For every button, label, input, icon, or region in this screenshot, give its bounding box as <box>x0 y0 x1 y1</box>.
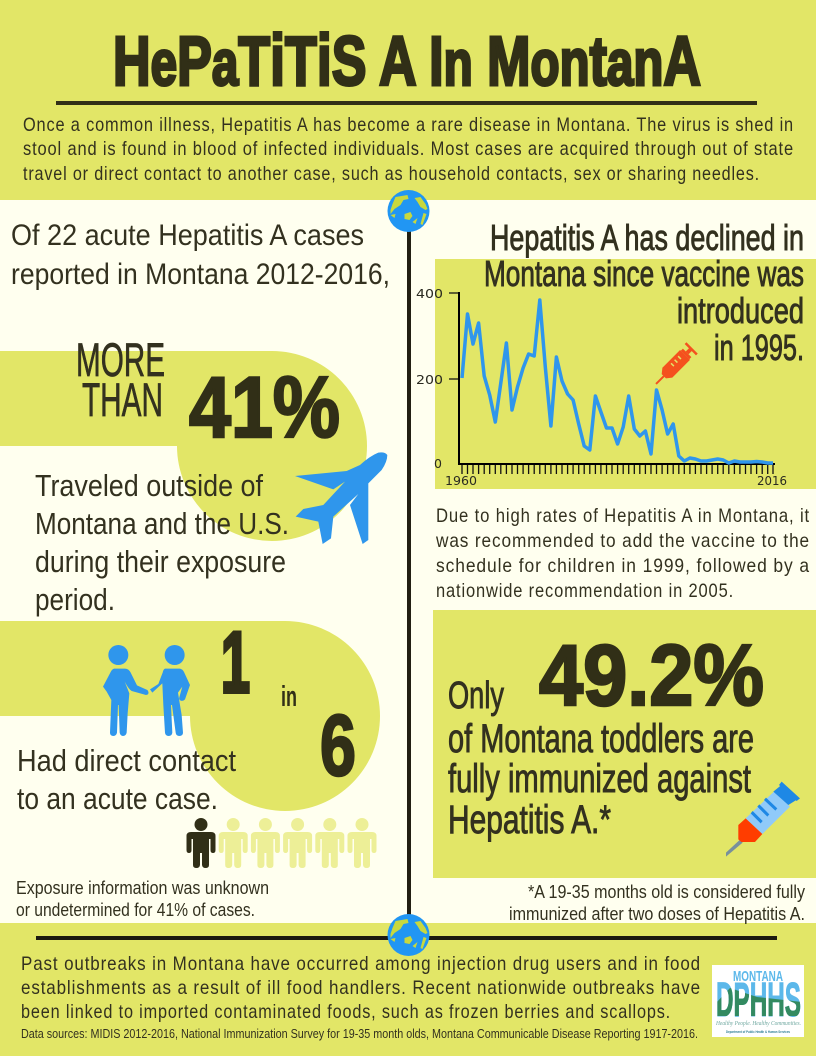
travel text: period. <box>35 582 115 617</box>
logo: Montana DPHHS: MONTANA <box>733 968 783 985</box>
travel text: during their exposure <box>35 544 286 579</box>
data sources: Data sources: MIDIS 2012-2016, National Immunization Survey for 19-35 month olds, Montana Communicable Disease Reporting 1917-2016. <box>21 1026 698 1041</box>
icon: two people shaking hands <box>103 645 190 736</box>
panel: header <box>0 0 816 200</box>
vaccine recommendation text <box>435 505 810 602</box>
stat: 49.2%: 49.2% <box>539 628 764 724</box>
chart heading <box>484 217 804 368</box>
exposure note: Exposure information was unknown <box>16 878 269 898</box>
logo: Montana DPHHS <box>712 965 804 1037</box>
line chart: cases 1960-2016: 2016 <box>757 473 787 488</box>
icon: airplane <box>295 452 387 544</box>
panel: footer <box>0 923 816 1056</box>
title rule <box>56 101 757 105</box>
title: HePaTiTiS A In MontanA <box>113 21 701 101</box>
more than label: MORE <box>76 333 165 386</box>
icon row: 1 of 6 people <box>186 818 376 868</box>
intro paragraph <box>23 114 794 185</box>
icon: bottom globe <box>388 914 430 956</box>
more than label <box>76 333 165 426</box>
logo: Montana DPHHS: Department of Public Health & Human Services <box>726 1030 790 1034</box>
line chart: cases 1960-2016: 1960 <box>445 473 477 488</box>
only label: Only <box>448 675 504 717</box>
stat: 6: 6 <box>320 698 356 794</box>
lead text: 22 cases: Of 22 acute Hepatitis A cases <box>11 219 364 252</box>
panel: chart background <box>435 259 816 489</box>
outbreaks paragraph: Past outbreaks in Montana have occurred among injection drug users and in food <box>21 953 701 975</box>
stat: in: in <box>281 681 297 713</box>
icon: top globe <box>388 190 430 232</box>
outbreaks paragraph: been linked to imported contaminated foods, such as frozen berries and scallops. <box>21 1001 671 1023</box>
panel: left band 1 in 6 <box>0 621 380 811</box>
toddlers text <box>448 717 754 842</box>
exposure note <box>16 878 269 920</box>
lead text: 22 cases: reported in Montana 2012-2016, <box>11 258 390 291</box>
outbreaks paragraph <box>21 953 701 1023</box>
toddlers text: Hepatitis A.* <box>448 798 611 842</box>
direct contact text: to an acute case. <box>17 781 218 816</box>
footer rule <box>36 936 777 940</box>
line chart: cases 1960-2016 <box>416 286 787 488</box>
footnote <box>509 882 805 924</box>
more than label: THAN <box>82 373 163 426</box>
lead text: 22 cases <box>11 219 390 291</box>
panel: toddlers immunization <box>433 610 816 878</box>
travel text <box>35 468 289 617</box>
vaccine recommendation text: nationwide recommendation in 2005. <box>436 580 734 602</box>
line chart: cases 1960-2016: 200 <box>416 372 443 387</box>
outbreaks paragraph: establishments as a result of ill food handlers. Recent nationwide outbreaks have <box>21 977 701 999</box>
exposure note: or undetermined for 41% of cases. <box>16 900 255 920</box>
direct contact text: Had direct contact <box>17 743 236 778</box>
panel: left band 41% <box>0 351 367 541</box>
direct contact text <box>17 743 236 816</box>
line chart: cases 1960-2016: 400 <box>416 286 443 301</box>
stat: 1: 1 <box>221 615 250 711</box>
icon: blue syringe <box>726 782 800 857</box>
stat: 41%: 41% <box>189 360 340 456</box>
center divider line <box>407 225 411 925</box>
line chart: cases 1960-2016: 0 <box>434 456 442 471</box>
icon: orange syringe <box>650 342 698 390</box>
travel text: Montana and the U.S. <box>35 506 289 541</box>
logo: Montana DPHHS: Healthy People. Healthy Communities. <box>715 1021 801 1027</box>
travel text: Traveled outside of <box>35 468 263 503</box>
